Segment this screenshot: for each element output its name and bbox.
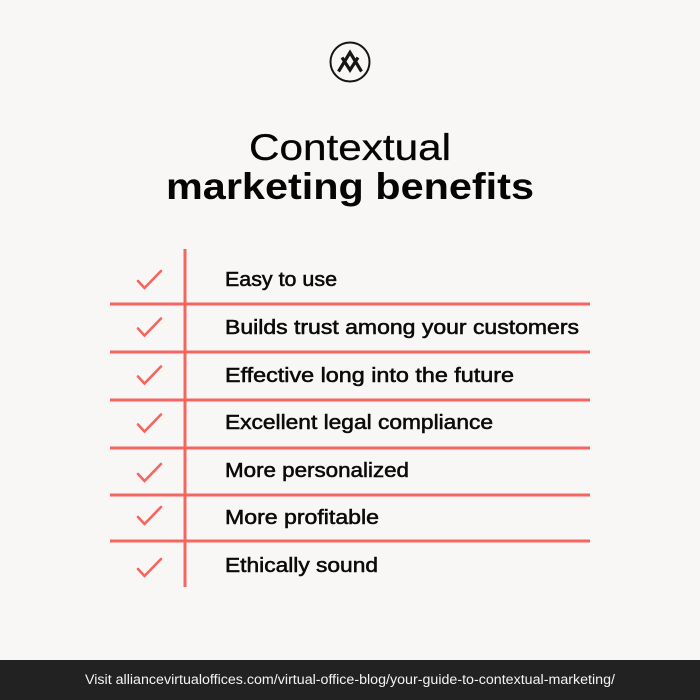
logo bbox=[330, 42, 370, 82]
check marks bbox=[138, 271, 161, 576]
benefit labels: Ethically sound bbox=[225, 555, 378, 577]
checklist table bbox=[110, 249, 590, 587]
benefit labels: Effective long into the future bbox=[225, 365, 514, 387]
benefit labels: More profitable bbox=[225, 507, 379, 529]
table grid lines bbox=[110, 249, 590, 587]
title: Contextual bbox=[249, 127, 451, 168]
benefit labels: Builds trust among your customers bbox=[225, 317, 579, 339]
benefit labels: More personalized bbox=[225, 460, 409, 482]
footer bar bbox=[0, 660, 700, 700]
benefit labels bbox=[225, 269, 579, 577]
benefit labels: Excellent legal compliance bbox=[225, 412, 493, 434]
title bbox=[166, 127, 534, 207]
footer bar: Visit alliancevirtualoffices.com/virtual-office-blog/your-guide-to-contextual-marketing/ bbox=[85, 672, 615, 687]
benefit labels: Easy to use bbox=[225, 269, 337, 291]
title: marketing benefits bbox=[166, 166, 534, 207]
